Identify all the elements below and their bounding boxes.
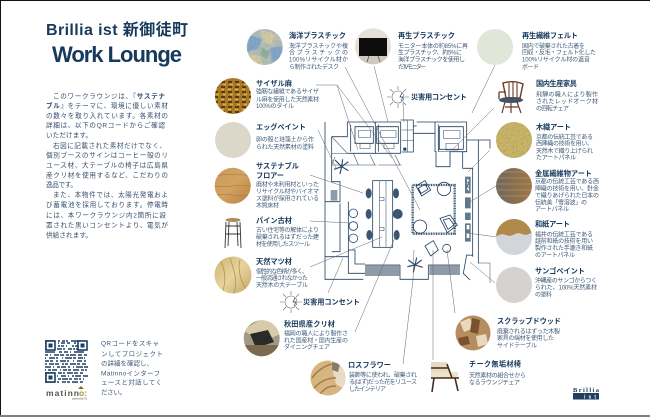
item: 天然マツ材: 天然木の大テーブル: [256, 281, 308, 289]
item: 天然マツ材: 個性的な色柄が多く、: [256, 267, 308, 275]
item: 金属繊維物アート: 京都の伝統工芸である西: [535, 178, 599, 186]
intro text block: 供給されます。: [46, 230, 92, 240]
item: 再生プラスチック: 海洋プラスチックを使用し: [398, 56, 465, 64]
item: 和紙アート: [496, 219, 593, 258]
item: 秋田県産クリ材: 福岡の職人により製作さ: [284, 329, 348, 337]
QR caption: の詳細を確認し、: [101, 359, 153, 368]
item: 再生プラスチック: [355, 28, 468, 71]
item: 国内生産家具: 国内生産家具: [536, 79, 577, 88]
item: サイザル麻: ル麻を使用した天然素材: [256, 95, 319, 103]
item: 海洋プラスチック: 海洋プラスチックや複: [289, 42, 348, 50]
matinno logo: powered by GS: [72, 398, 87, 400]
item: パイン古材: 材を使用したスツール: [256, 240, 310, 248]
item: サイザル麻: [214, 78, 319, 114]
item: 金属繊維物アート: アートパネル: [535, 206, 569, 213]
item: サステナブルフロアー: サステナブル: [256, 161, 299, 170]
item: スクラップドウッド: サイドテーブル: [497, 341, 537, 349]
item: 海洋プラスチック: ら制作されたデスク: [289, 63, 339, 71]
icon: 災害用コンセント (lower): [280, 291, 360, 313]
item: 和紙アート: 和紙アート: [535, 220, 570, 229]
item: チーク無垢材椅: [431, 360, 526, 392]
item: 国内生産家具: されたレッドオーク材: [536, 97, 598, 105]
item: サイザル麻: 100%のタイル: [256, 102, 294, 110]
Brillia ist logo: ist: [584, 394, 596, 400]
item: 秋田県産クリ材: 秋田県産クリ材: [284, 320, 335, 329]
item: 木織アート: 木織アート: [536, 122, 571, 131]
item: 国内生産家具: 飛騨の職人により製作: [536, 91, 598, 99]
item: 金属繊維物アート: 伝統美「雪溶波」の: [535, 198, 587, 206]
QR caption: QRコードをスキャ: [101, 340, 159, 348]
item: 再生プラスチック: 生プラスチック、約5%に: [398, 49, 462, 57]
intro text block: 産クリ材を使用するなど、こだわりの: [46, 170, 168, 180]
QR caption: ェースと対話してく: [101, 378, 162, 387]
item: サステナブルフロアー: 木質床材: [256, 202, 279, 210]
floor plan: [325, 120, 490, 280]
item: 再生繊維フェルト: 回収・反毛・フェルト化した: [522, 49, 596, 57]
intro text block: 置された黒いコンセントより、電気が: [46, 220, 168, 230]
title: Work Lounge: [52, 42, 182, 67]
item: ロスフラワー: ロスフラワー: [348, 361, 391, 370]
item: ロスフラワー: る(はず)だった花をリユース: [349, 378, 417, 386]
intro text block: 個別ブースのサインはコーヒー殻のリ: [46, 150, 168, 160]
intro text block: 逸品です。: [46, 180, 77, 189]
item: 再生繊維フェルト: [477, 29, 596, 71]
QR code: [45, 340, 88, 383]
item: 再生繊維フェルト: ボード: [522, 63, 539, 71]
intro text block: び蓄電池を採用しております。停電時: [46, 200, 168, 209]
item: 金属繊維物アート: 陣織の技術を用い、針金: [535, 185, 599, 193]
item: 天然マツ材: [214, 256, 308, 294]
big table: [366, 181, 403, 247]
item: サステナブルフロアー: ス塗料が採用されている: [256, 195, 319, 203]
item: 木織アート: 京都の伝統工芸である: [536, 133, 593, 141]
item: スクラップドウッド: [456, 316, 561, 350]
item: チーク無垢材椅: なるラウンジチェア: [469, 379, 520, 387]
item: 秋田県産クリ材: れた国産材・国内生産の: [284, 337, 348, 345]
QR caption: ンしてプロジェクト: [101, 350, 163, 358]
icon: 災害用コンセント (upper): 災害用コンセント: [411, 92, 467, 101]
intro text block: 右図に記載された素材だけでなく、: [53, 141, 166, 150]
item: 再生プラスチック: 再生プラスチック: [398, 31, 455, 40]
matinno logo: o:: [79, 388, 87, 398]
item: 再生繊維フェルト: 国内で破棄された古着を: [522, 42, 585, 50]
item: 木織アート: [496, 122, 593, 162]
item: 再生プラスチック: モニター本体の約85%に再: [398, 42, 468, 50]
item: サンゴペイント: 沖縄産のサンゴからつく: [535, 276, 597, 284]
item: チーク無垢材椅: 天然素材の組合せから: [469, 371, 526, 379]
item: 和紙アート: 製作された手漉き和紙: [535, 244, 593, 252]
plants: [334, 159, 423, 272]
intro text block: には、本ワークラウンジ内2箇所に設: [46, 210, 166, 220]
item: 和紙アート: 越前和紙の技術を用い: [535, 237, 593, 245]
item: エッグペイント: エッグペイント: [256, 122, 306, 131]
item: 海洋プラスチック: 100%リサイクル材か: [289, 56, 348, 64]
intro text block: の数々を取り入れています。各素材の: [46, 111, 168, 120]
item: 金属繊維物アート: 金属繊維物アート: [535, 169, 592, 178]
item: ロスフラワー: [310, 360, 417, 396]
icon: 災害用コンセント (upper): [387, 86, 467, 108]
item: サステナブルフロアー: フロアー: [256, 171, 284, 180]
item: ロスフラワー: 装飾等に使われ、破棄され: [349, 371, 417, 379]
rug and lounge seats: [413, 181, 457, 256]
item: サイザル麻: 強靭な繊維であるサイザ: [256, 88, 319, 96]
item: 和紙アート: のアートパネル: [535, 252, 575, 259]
item: エッグペイント: [215, 122, 314, 158]
item: 木織アート: たアートパネル: [536, 155, 576, 162]
item: サンゴペイント: られた、100%天然素材: [535, 283, 597, 291]
intro text block: このワークラウンジは、『サステナ: [53, 92, 165, 100]
item: チーク無垢材椅: チーク無垢材椅: [469, 360, 521, 369]
item: 和紙アート: 福井の伝統工芸である: [535, 230, 593, 238]
intro text block: [46, 92, 168, 240]
item: サンゴペイント: [496, 266, 597, 303]
item: 再生繊維フェルト: 再生繊維フェルト: [522, 31, 578, 40]
item: 海洋プラスチック: 海洋プラスチック: [289, 31, 346, 40]
item: サイザル麻: サイザル麻: [256, 79, 293, 88]
QR caption: ださい。: [101, 388, 126, 396]
item: パイン古材: パイン古材: [256, 216, 292, 225]
item: 木織アート: 天然木で織り上げられ: [536, 147, 593, 155]
item: 再生繊維フェルト: 100%リサイクル材の遮音: [522, 56, 590, 64]
intro text block: また、本物件では、太陽光発電およ: [53, 190, 168, 199]
QR caption: [101, 340, 163, 396]
windows and equipment: [331, 177, 471, 276]
item: 天然マツ材: 一般流通されなかった: [256, 274, 308, 282]
item: 金属繊維物アート: で織りあげられた日本の: [535, 191, 599, 199]
item: 海洋プラスチック: 合プラスチックの: [289, 49, 348, 57]
item: 秋田県産クリ材: [243, 318, 348, 357]
item: 再生プラスチック: たTVモニター: [398, 63, 426, 71]
item: パイン古材: [225, 216, 319, 248]
item: ロスフラワー: したインテリア: [349, 386, 386, 393]
item: 天然マツ材: 天然マツ材: [256, 257, 292, 266]
item: 国内生産家具: [499, 79, 598, 113]
title: Brillia ist 新御徒町: [46, 21, 188, 39]
item: 秋田県産クリ材: ダイニングチェア: [284, 343, 330, 351]
item: 金属繊維物アート: [496, 168, 599, 213]
item: サステナブルフロアー: 廃材や未利用材といった: [256, 181, 319, 189]
Brillia ist logo: [573, 387, 600, 400]
QR caption: Matinnoインターフ: [101, 368, 160, 377]
Brillia ist logo: Brillia: [573, 387, 600, 394]
item: パイン古材: 破棄されるはずだった建: [256, 233, 319, 241]
leader lines: [310, 65, 497, 364]
item: スクラップドウッド: 廃棄されるはずった木製: [497, 327, 560, 335]
intro text block: ユース材、大テーブルの椅子は広島県: [46, 160, 168, 170]
matinno logo: [46, 386, 87, 400]
item: スクラップドウッド: スクラップドウッド: [497, 316, 561, 325]
title: [46, 21, 188, 67]
item: 木織アート: 西陣織の技術を用い、: [536, 140, 593, 148]
item: サステナブルフロアー: リサイクル材やバイオマ: [256, 187, 319, 195]
item: サンゴペイント: の塗料: [535, 290, 552, 298]
item: エッグペイント: 卵の殻と珪藻土から作: [256, 135, 314, 143]
intro text block: ブル』をテーマに、環境に優しい素材: [46, 101, 168, 110]
stools: [349, 209, 358, 243]
intro text block: いただけます。: [46, 132, 92, 140]
item: サステナブルフロアー: [214, 161, 319, 210]
matinno logo: matinn: [46, 388, 79, 398]
item: エッグペイント: られた天然素材の塗料: [256, 143, 314, 151]
item: 海洋プラスチック: [245, 28, 348, 71]
item: スクラップドウッド: 家具の端材を使用した: [497, 334, 554, 342]
item: 国内生産家具: の回転チェア: [536, 105, 569, 113]
walls and booths: [325, 120, 490, 280]
intro text block: 詳細は、以下のQRコードからご確認: [46, 120, 165, 130]
item: パイン古材: 古い住宅等の解体により: [256, 226, 319, 234]
item: サンゴペイント: サンゴペイント: [535, 266, 585, 275]
icon: 災害用コンセント (lower): 災害用コンセント: [303, 297, 360, 306]
